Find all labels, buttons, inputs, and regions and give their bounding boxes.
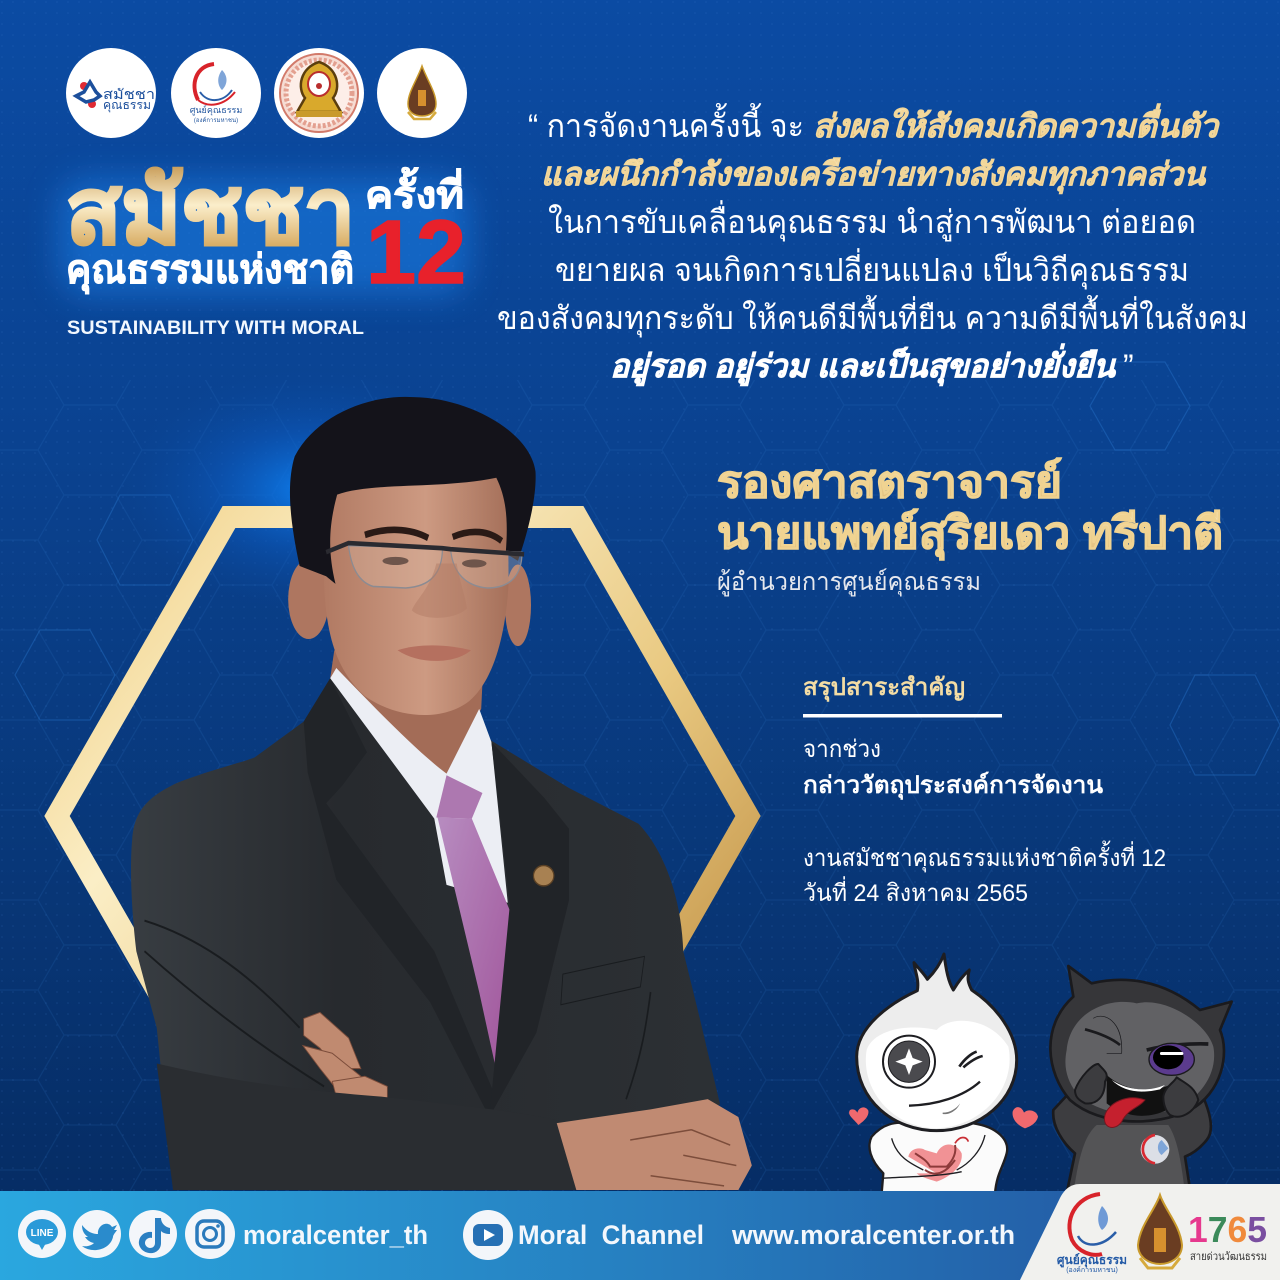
ears [288,559,531,646]
logo: ministry of culture seal [274,48,364,138]
title: samatcha: สมัชชา [66,161,355,263]
logo: samatcha khunnatham: สมัชชา [103,86,155,102]
eyes [382,557,487,568]
heart right [1013,1107,1038,1128]
glasses [326,543,524,588]
social icon: tiktok [129,1210,177,1258]
social icon: instagram [185,1209,235,1259]
social icon: youtube [463,1210,513,1260]
title glow [58,178,470,296]
forearm sleeve [157,1063,576,1190]
logo row [66,48,467,138]
jacket [131,678,720,1190]
lower hand [303,1012,387,1098]
summary block [803,674,1166,907]
neck [330,650,483,775]
logo: moral center small: (องค์การมหาชน) [1066,1266,1118,1274]
channel name: Moral Channel [518,1220,704,1250]
face [324,456,509,715]
hotline 1765: สายด่วนวัฒนธรรม [1190,1251,1267,1263]
name line 1: รองศาสตราจารย์ [717,457,1062,507]
logo: moral center: ศูนย์คุณธรรม [190,104,242,116]
position: ผู้อำนวยการศูนย์คุณธรรม [717,568,981,597]
mascot: black character [1050,966,1232,1193]
logo: moral center small [1057,1194,1127,1274]
lapel pin [533,866,554,886]
title: round: ครั้งที่ [365,167,464,217]
pocket and folds [144,921,651,1099]
logo: samatcha khunnatham [66,48,156,138]
hotline 1765: 1765 [1188,1209,1267,1250]
hair [290,397,536,584]
title block [58,161,470,339]
quote [497,103,1248,386]
event date: วันที่ 24 สิงหาคม 2565 [803,876,1028,907]
quote line 5: ของสังคมทุกระดับ ให้คนดีมีพื้นที่ยืน ความดีมีพื้นที่ในสังคม [497,295,1248,338]
shirt [330,668,508,903]
name line 2: นายแพทย์สุริยเดว ทรีปาตี [717,508,1223,561]
subtitle: SUSTAINABILITY WITH MORAL [67,318,364,339]
mascots [849,954,1232,1193]
summary heading: สรุปสาระสำคัญ [803,674,965,703]
portrait [131,397,752,1190]
brows [365,530,502,541]
social icon: line [18,1210,66,1258]
quote line 2: และผนึกกำลังของเครือข่ายทางสังคมทุกภาคส่วน [541,156,1206,194]
handle: moralcenter_th [243,1220,428,1250]
footer bar [0,1191,1280,1280]
social icon: twitter [73,1210,121,1258]
website: www.moralcenter.or.th [731,1220,1015,1250]
social icon: line: LINE [31,1228,54,1239]
footer logo panel [1020,1184,1280,1280]
heading rule [803,714,1002,718]
session name: กล่าววัตถุประสงค์การจัดงาน [803,771,1104,801]
logo: royal crest small [1138,1195,1182,1268]
mascot: white character [857,954,1017,1193]
tie [436,775,511,1076]
name block [717,457,1223,597]
logo: moral center small: ศูนย์คุณธรรม [1057,1253,1127,1268]
title: number 12: 12 [366,203,466,303]
logo: moral center: (องค์การมหาชน) [194,116,238,124]
heart left [849,1107,868,1125]
logo: moral center [171,48,261,138]
mouth [398,645,471,661]
quote line 4: ขยายผล จนเกิดการเปลี่ยนแปลง เป็นวิถีคุณธรรม [555,248,1189,290]
upper hand [557,1099,752,1190]
quote line 6: อยู่รอด อยู่ร่วม และเป็นสุขอย่างยั่งยืน [610,343,1116,386]
quote line 3: ในการขับเคลื่อนคุณธรรม นำสู่การพัฒนา ต่อยอด [548,200,1196,242]
quote line 1: “ การจัดงานครั้งนี้ จะ [528,103,804,144]
gold hexagon frame [57,517,748,1115]
nose [412,563,467,618]
quote line 1: ส่งผลให้สังคมเกิดความตื่นตัว [813,103,1220,144]
event name: งานสมัชชาคุณธรรมแห่งชาติครั้งที่ 12 [803,840,1166,873]
title: national morality: คุณธรรมแห่งชาติ [66,248,354,295]
quote line 6: ” [1123,348,1134,384]
logo: royal crest [377,48,467,138]
from session: จากช่วง [803,736,881,763]
logo: samatcha khunnatham: คุณธรรม [103,98,151,113]
lapels [304,678,569,1117]
quote line 1 [528,103,1220,144]
